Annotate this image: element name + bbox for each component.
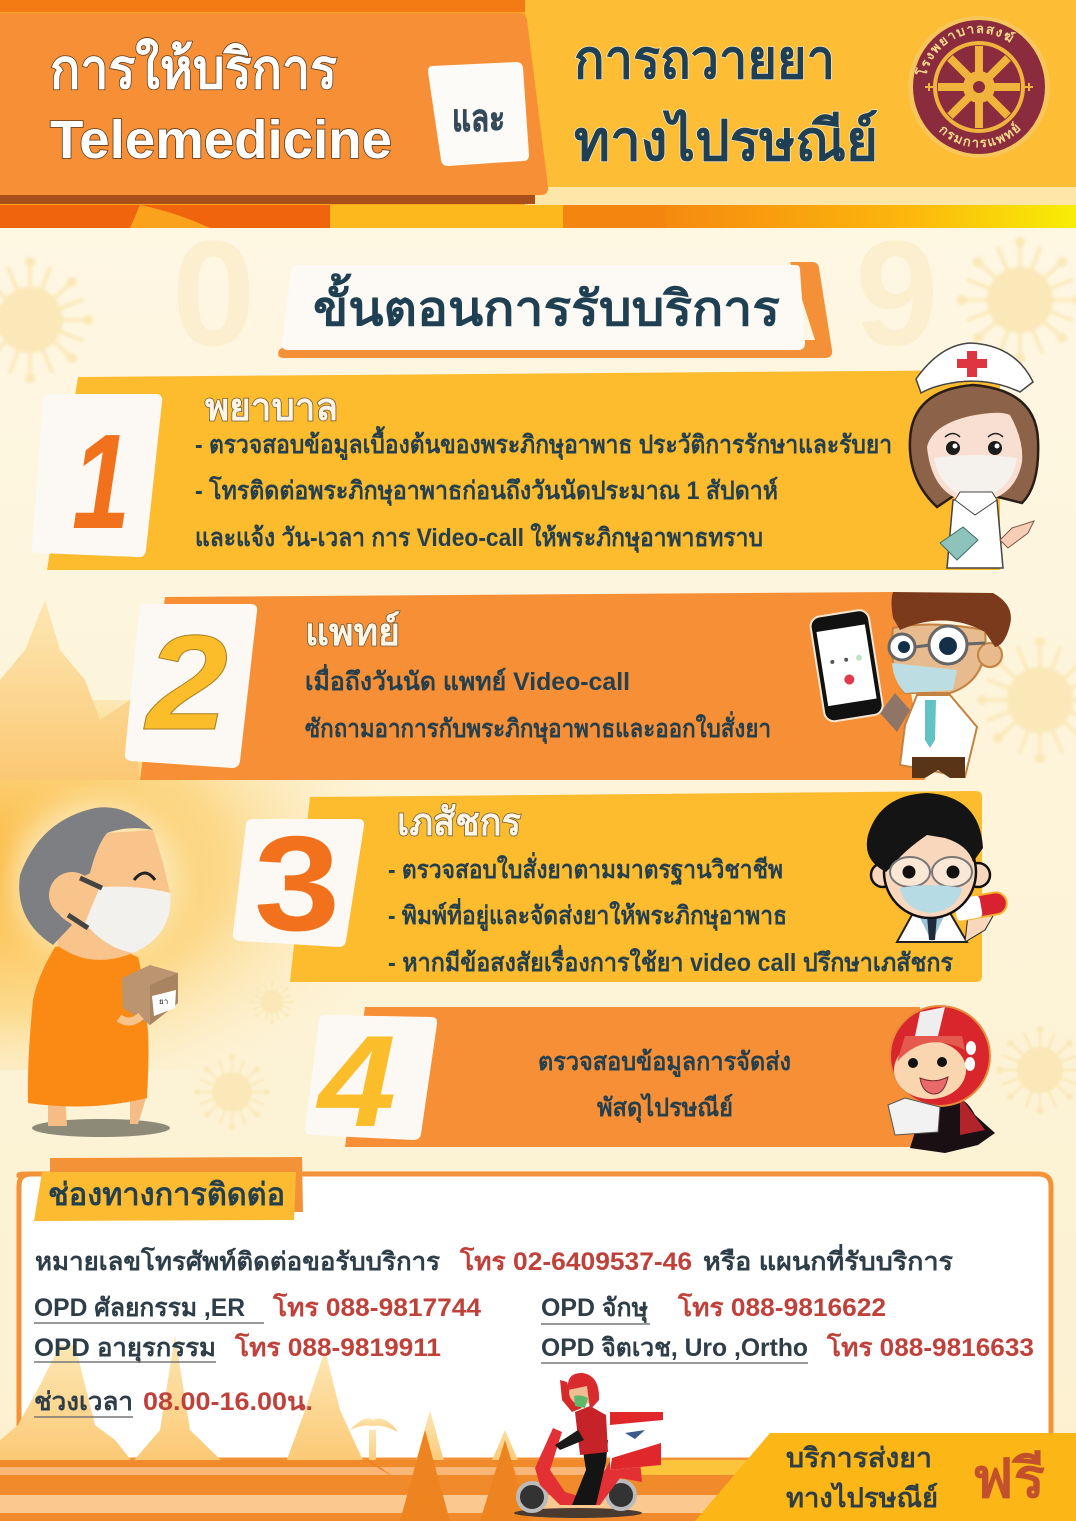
contact line: hotline: โทร 02-6409537-46 (459, 1246, 692, 1276)
contact: OPD psychiatry, uro, ortho: โทร 088-9816633 (826, 1332, 1034, 1362)
step 1 number card: 1 (72, 406, 130, 557)
monk head (57, 830, 170, 960)
header left panel shadow (0, 195, 535, 204)
step 1 panel (32, 343, 1038, 570)
contact: OPD medicine: OPD อายุรกรรม (34, 1334, 216, 1364)
background: faint covid digits: 0 (172, 209, 255, 377)
step 3 number card (233, 808, 364, 959)
bottom right badge: ทางไปรษณีย์ (786, 1482, 938, 1513)
monk robe (28, 945, 148, 1107)
monk mask (85, 887, 170, 953)
step 4 number card (305, 1008, 437, 1154)
title: การถวายยาทางไปรษณีย์ (574, 30, 878, 172)
contact: OPD surgery: โทร 088-9817744 (272, 1292, 481, 1322)
bottom right badge: ฟรี (972, 1449, 1045, 1509)
step 4 text: ตรวจสอบข้อมูลการจัดส่ง (538, 1048, 791, 1078)
step 1 heading: พยาบาล (205, 387, 338, 429)
contact: OPD psychiatry, uro, ortho: OPD จิตเวช, Uro ,Ortho (541, 1334, 808, 1362)
contact: OPD eye: โทร 088-9816622 (677, 1292, 886, 1322)
hospital seal (908, 16, 1050, 158)
step 2 text (305, 664, 771, 745)
background: faint covid digits (172, 209, 938, 377)
bottom right badge: บริการส่งยา (786, 1443, 932, 1473)
step 1 text (195, 425, 892, 554)
contact line: hotline (35, 1244, 954, 1276)
bottom right badge (695, 1433, 1076, 1521)
step 4 panel (305, 1006, 995, 1154)
background: faint covid digits: 9 (855, 209, 938, 377)
background: virus pattern (0, 237, 1076, 1130)
step 2 band (140, 592, 925, 780)
step 3 text: - หากมีข้อสงสัยเรื่องการใช้ยา video call ปรึกษาเภสัชกร (388, 945, 954, 977)
monk with parcel (10, 802, 180, 1137)
contact: OPD psychiatry, uro, ortho (541, 1332, 1034, 1363)
step 2 text: ซักถามอาการกับพระภิกษุอาพาธและออกใบสั่งยา (305, 711, 771, 745)
step 1 band (47, 370, 1000, 570)
step 3 band (290, 791, 982, 982)
parcel (119, 965, 178, 1025)
contact tab: ช่องทางการติดต่อ (48, 1177, 285, 1212)
hospital seal: โรงพยาบาลสงฆ์ (914, 26, 1016, 75)
step 2 number card: 2 (143, 607, 228, 758)
monk feet (48, 1098, 146, 1126)
card: และ: และ (452, 98, 505, 140)
contact: OPD eye: OPD จักษุ (541, 1294, 648, 1324)
step 2 number card (125, 604, 257, 768)
contact: OPD surgery: OPD ศัลยกรรม ,ER (34, 1294, 245, 1322)
monk halo (10, 802, 180, 958)
title: การถวายยาทางไปรษณีย์: การถวายยา (574, 30, 835, 90)
step 2 text: เมื่อถึงวันนัด แพทย์ Video-call (305, 664, 630, 696)
title: การให้บริการ Telemedicine: การให้บริการ (50, 37, 337, 100)
step 2 panel (125, 592, 1011, 780)
step 4 band (345, 1007, 925, 1147)
scooter body (535, 1428, 642, 1505)
step 4 number card: 4 (315, 1008, 396, 1154)
step 3 heading: เภสัชกร (397, 802, 522, 844)
contact: OPD surgery (34, 1292, 481, 1323)
contact: hours: ช่วงเวลา (34, 1388, 133, 1416)
step 3 panel (233, 791, 1009, 982)
icon: doctor with phone (809, 592, 1011, 778)
heading: ขั้นตอนการรับบริการ: ขั้นตอนการรับบริการ (313, 273, 780, 336)
contact: OPD eye (541, 1292, 886, 1324)
heading: ขั้นตอนการรับบริการ (278, 262, 832, 358)
rider (555, 1373, 608, 1505)
card: และ (428, 62, 529, 166)
step 4 text (538, 1048, 791, 1124)
monk shadow (32, 1119, 170, 1137)
step 1 number card (32, 394, 162, 557)
step 1 text: - โทรติดต่อพระภิกษุอาพาธก่อนถึงวันนัดประมาณ 1 สัปดาห์ (195, 475, 778, 507)
contact tab (34, 1157, 303, 1221)
contact line: hotline: หรือ แผนกที่รับบริการ (703, 1244, 954, 1276)
delivery box (610, 1412, 663, 1470)
contact section (0, 1157, 1051, 1465)
contact: OPD medicine (34, 1332, 441, 1364)
hospital seal: กรมการแพทย์ (938, 120, 1021, 148)
footer stripes (0, 1430, 1076, 1521)
contact: OPD medicine: โทร 088-9819911 (234, 1332, 441, 1362)
icon: delivery mascot (888, 1006, 995, 1153)
background: temple silhouette (0, 600, 140, 780)
step 3 text (388, 852, 954, 977)
title: การให้บริการ Telemedicine: Telemedicine (50, 110, 392, 170)
scooter wheels (518, 1481, 635, 1511)
step 3 text: - พิมพ์ที่อยู่และจัดส่งยาให้พระภิกษุอาพาธ (388, 898, 787, 932)
contact line: hotline: หมายเลขโทรศัพท์ติดต่อขอรับบริการ (35, 1246, 441, 1276)
title: การถวายยาทางไปรษณีย์: ทางไปรษณีย์ (574, 108, 878, 172)
header left panel (0, 13, 548, 195)
contact: hours (34, 1388, 313, 1417)
step 3 text: - ตรวจสอบใบสั่งยาตามมาตรฐานวิชาชีพ (388, 852, 783, 886)
header band (0, 0, 1076, 228)
step 3 number card: 3 (254, 808, 340, 959)
icon: nurse (910, 343, 1038, 568)
icon: pharmacist (867, 793, 1009, 942)
step 4 text: พัสดุไปรษณีย์ (597, 1092, 733, 1124)
background glow behind monk (0, 700, 420, 1070)
step 2 heading: แพทย์ (305, 611, 400, 654)
temple silhouette footer (0, 1335, 520, 1465)
parcel: ยา (159, 997, 168, 1006)
step 1 text: และแจ้ง วัน-เวลา การ Video-call ให้พระภิกษุอาพาธทราบ (195, 522, 763, 554)
step 1 text: - ตรวจสอบข้อมูลเบื้องต้นของพระภิกษุอาพาธ ประวัติการรักษาและรับยา (195, 425, 892, 461)
contact: hours: 08.00-16.00น. (143, 1388, 313, 1416)
icon: scooter rider (514, 1373, 663, 1518)
monk eye (134, 873, 155, 880)
contact panel (19, 1174, 1051, 1460)
title: การให้บริการ Telemedicine (50, 37, 392, 170)
